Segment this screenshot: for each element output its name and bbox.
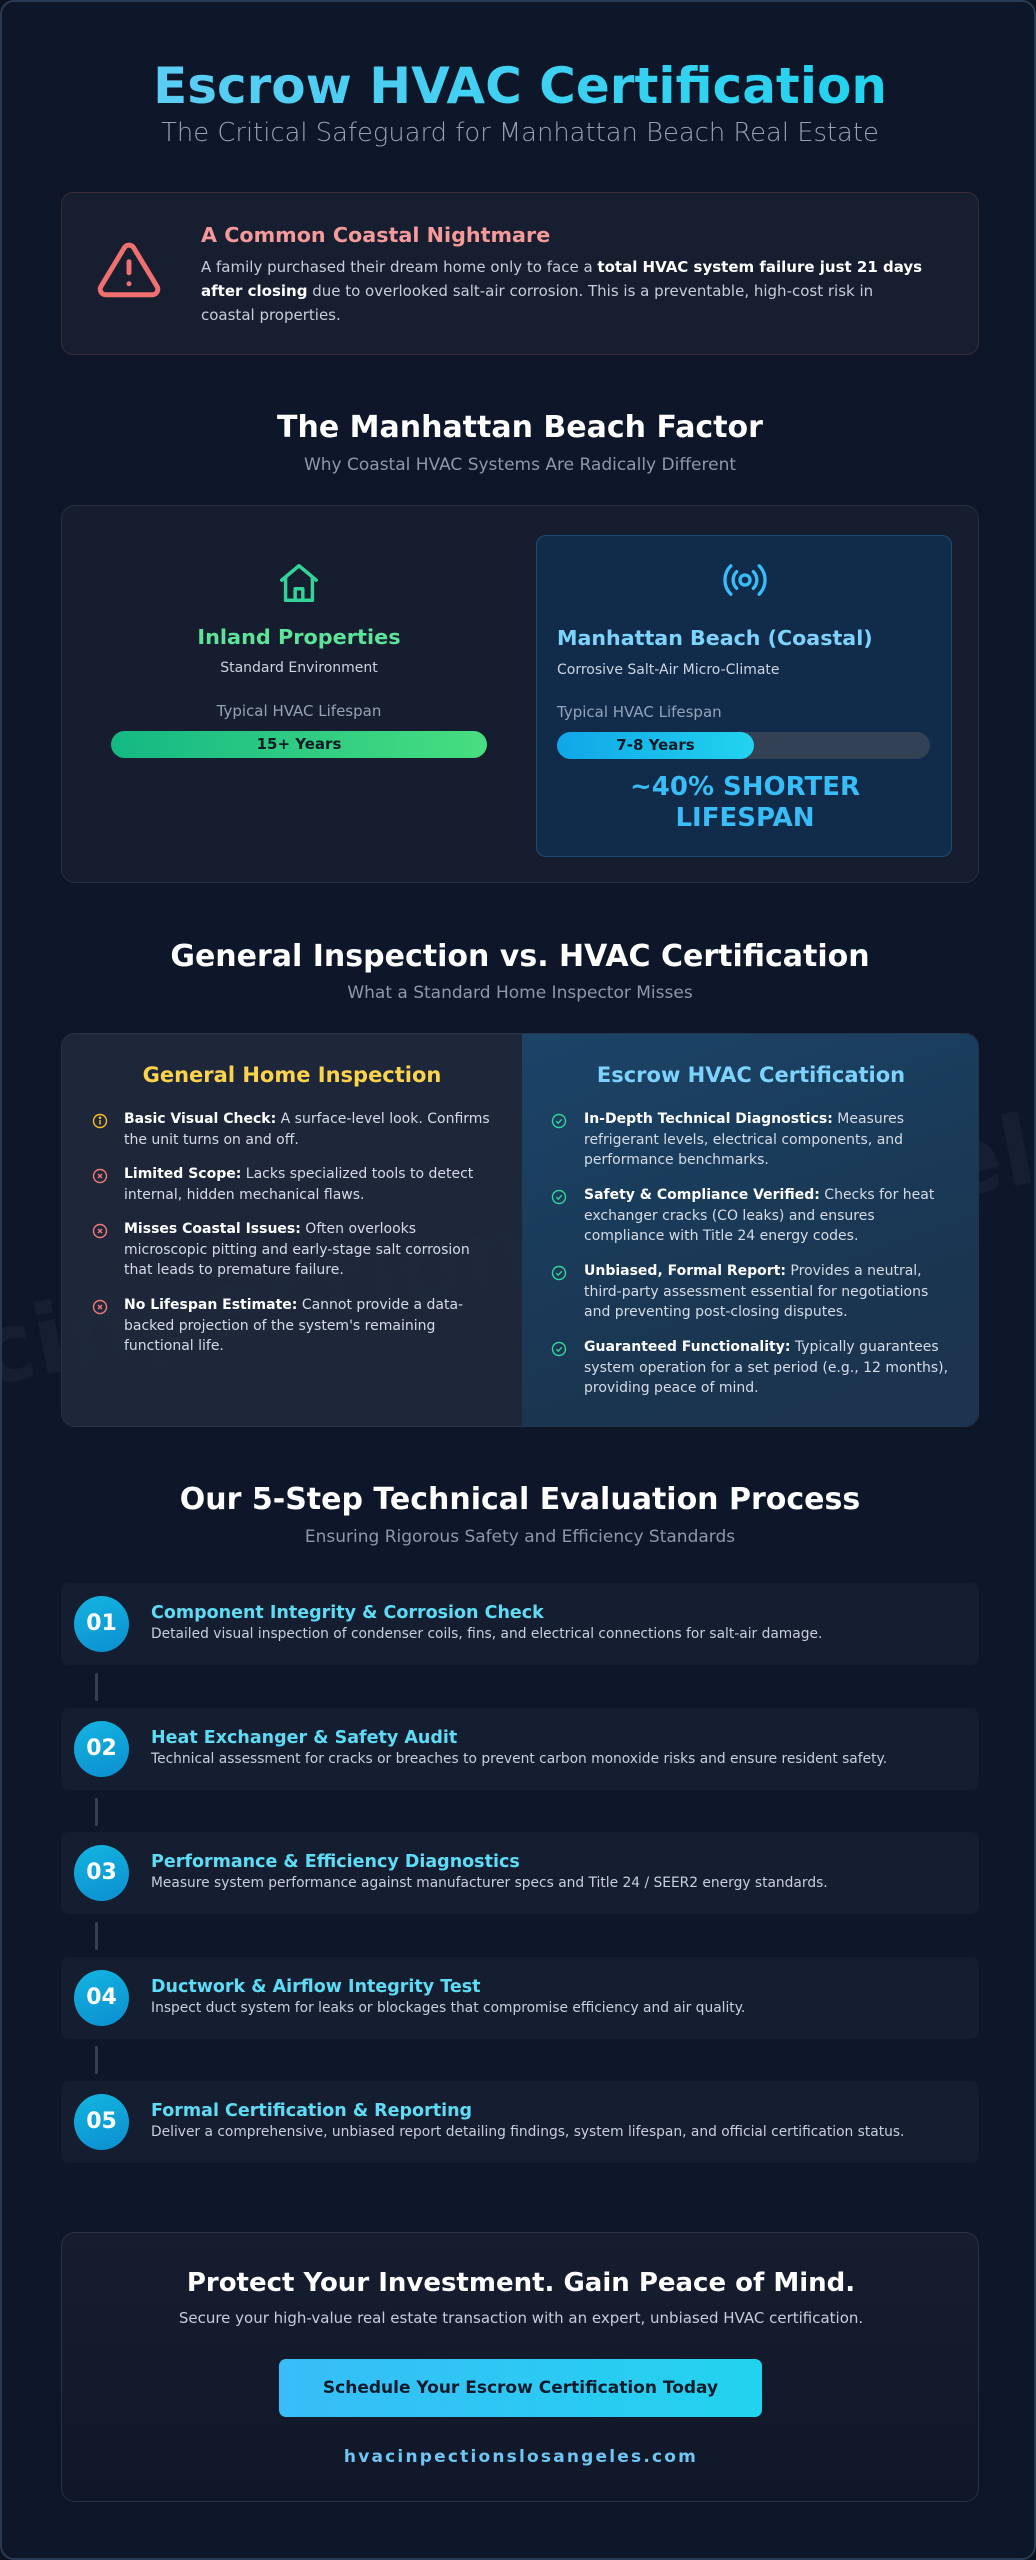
heading: general vs certification: General Inspection vs. HVAC Certification (170, 939, 870, 974)
step 1: Detailed visual inspection of condenser coils, fins, and electrical connections for salt-air damage. (151, 1626, 822, 1642)
bar: 15+ years (111, 731, 487, 758)
label: Typical HVAC Lifespan (217, 702, 381, 720)
step 3: 03 (86, 1860, 117, 1885)
title: Escrow HVAC Certification (153, 57, 887, 115)
button: Schedule Your Escrow Certification Today (323, 2378, 718, 2398)
icon: house (280, 564, 318, 602)
step 3: Performance & Efficiency Diagnostics (151, 1852, 520, 1872)
inland sub: Standard Environment (220, 660, 378, 676)
button (279, 2359, 762, 2417)
panel: call to action (61, 2232, 979, 2502)
item: safety: Safety & Compliance Verified: Checks for heat exchanger cracks (CO leaks) and ensures compliance with Title 24 energy codes. (584, 1187, 934, 1244)
step 4 (61, 1957, 979, 2039)
website url: hvacinpectionslosangeles.com (344, 2447, 698, 2467)
subheading: Ensuring Rigorous Safety and Efficiency Standards (305, 1527, 735, 1547)
subheading: Why Coastal HVAC Systems Are Radically Different (304, 455, 736, 475)
heading: 5-step process: Our 5-Step Technical Evaluation Process (180, 1482, 860, 1517)
step 4: Ductwork & Airflow Integrity Test (151, 1977, 481, 1997)
item: report: Unbiased, Formal Report: Provides a neutral, third-party assessment essential for negotiations and preventing post-closing disputes. (584, 1263, 928, 1320)
callout: 40% shorter: ~40% SHORTER (630, 772, 860, 802)
subtitle: The Critical Safeguard for Manhattan Beach Real Estate (161, 118, 879, 148)
cta heading: Protect Your Investment. Gain Peace of Mind. (187, 2268, 855, 2298)
item: coastal issues: Misses Coastal Issues: Often overlooks microscopic pitting and early-stage salt corrosion that leads to premature failure. (124, 1221, 470, 1278)
alert text: A family purchased their dream home only to face a total HVAC system failure just 21 days after closing due to overlooked salt-air corrosion. This is a preventable, high-cost risk in coastal properties. (201, 258, 922, 324)
step 2: Heat Exchanger & Safety Audit (151, 1728, 457, 1748)
column: general inspection (62, 1034, 522, 1428)
inland column (111, 564, 487, 758)
subheading: What a Standard Home Inspector Misses (347, 983, 693, 1003)
step 5: Formal Certification & Reporting (151, 2101, 472, 2121)
step 5: 05 (86, 2109, 117, 2134)
step 5: Deliver a comprehensive, unbiased report detailing findings, system lifespan, and official certification status. (151, 2124, 904, 2140)
icon: broadcast (723, 564, 767, 596)
bar: 7-8 years (557, 732, 930, 759)
item: limited scope: Limited Scope: Lacks specialized tools to detect internal, hidden mechanical flaws. (124, 1166, 473, 1203)
step 2: 02 (86, 1736, 117, 1761)
panel: coastal nightmare alert (61, 192, 979, 355)
step 3 (61, 1832, 979, 1914)
step 2 (61, 1708, 979, 1790)
step 2: Technical assessment for cracks or breaches to prevent carbon monoxide risks and ensure resident safety. (151, 1751, 887, 1767)
label: Typical HVAC Lifespan (557, 703, 722, 721)
panel: comparison (61, 1033, 979, 1427)
panel: factor comparison (61, 505, 979, 883)
heading: Escrow HVAC Certification (597, 1063, 905, 1087)
step 3: Measure system performance against manufacturer specs and Title 24 / SEER2 energy standards. (151, 1875, 828, 1891)
heading: General Home Inspection (143, 1063, 441, 1087)
icon: warning triangle (98, 242, 160, 298)
callout: 40% shorter: LIFESPAN (675, 803, 815, 833)
coastal card (536, 535, 952, 857)
coastal title: Manhattan Beach (Coastal) (557, 626, 873, 650)
cta text: Secure your high-value real estate transaction with an expert, unbiased HVAC certification. (179, 2309, 863, 2327)
callout: 40% shorter (630, 772, 860, 833)
bar: 7-8 years: 7-8 Years (616, 736, 695, 754)
bar: 15+ years: 15+ Years (257, 735, 341, 753)
step 1: 01 (86, 1611, 117, 1636)
alert heading: A Common Coastal Nightmare (201, 223, 550, 247)
step 5 (61, 2081, 979, 2163)
item: basic visual: Basic Visual Check: A surface-level look. Confirms the unit turns on and off. (124, 1111, 490, 1148)
coastal sub: Corrosive Salt-Air Micro-Climate (557, 662, 780, 678)
step 4: 04 (86, 1985, 117, 2010)
column: escrow certification (522, 1034, 980, 1428)
inland title: Inland Properties (197, 625, 401, 649)
step 1: Component Integrity & Corrosion Check (151, 1603, 544, 1623)
item: guaranteed: Guaranteed Functionality: Typically guarantees system operation for a set period (e.g., 12 months), providing peace of mind. (584, 1339, 948, 1396)
item: no lifespan: No Lifespan Estimate: Cannot provide a data-backed projection of the system's remaining functional life. (124, 1297, 463, 1354)
step 4: Inspect duct system for leaks or blockages that compromise efficiency and air quality. (151, 2000, 745, 2016)
step 1 (61, 1583, 979, 1665)
item: diagnostics: In-Depth Technical Diagnostics: Measures refrigerant levels, electrical components, and performance benchmarks. (584, 1111, 904, 1168)
heading: manhattan beach factor: The Manhattan Beach Factor (277, 410, 763, 445)
